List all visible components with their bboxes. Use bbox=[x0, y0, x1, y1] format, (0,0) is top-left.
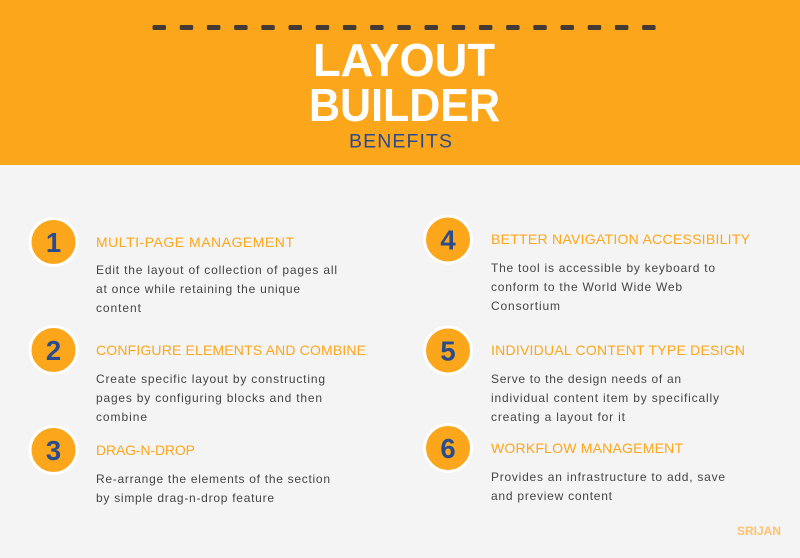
item 1: multi-page management: content bbox=[96, 301, 142, 315]
item 5: individual content type design: creating a layout for it bbox=[491, 410, 626, 424]
item 2: configure elements and combine: Create specific layout by constructing bbox=[96, 372, 325, 386]
subtitle: BENEFITS bbox=[349, 130, 452, 152]
item 5: individual content type design: INDIVIDUAL CONTENT TYPE DESIGN bbox=[491, 342, 745, 358]
item 1: multi-page management: at once while retaining the unique bbox=[96, 282, 300, 296]
item 4: better navigation accessibility: Consortium bbox=[491, 299, 560, 313]
item 2: configure elements and combine: pages by configuring blocks and then bbox=[96, 391, 322, 405]
item 5: individual content type design: Serve to the design needs of an bbox=[491, 372, 681, 386]
item 3: drag-n-drop: 3 bbox=[46, 435, 61, 466]
item 2: configure elements and combine bbox=[30, 326, 366, 424]
title: BUILDER bbox=[309, 79, 500, 131]
item 4: better navigation accessibility: conform to the World Wide Web bbox=[491, 280, 682, 294]
item 6: workflow management: 6 bbox=[440, 433, 456, 464]
item 6: workflow management: and preview content bbox=[491, 489, 613, 503]
item 1: multi-page management: Edit the layout of collection of pages all bbox=[96, 263, 337, 277]
item 3: drag-n-drop: by simple drag-n-drop feature bbox=[96, 491, 274, 505]
item 6: workflow management bbox=[424, 424, 725, 503]
item 6: workflow management: Provides an infrastructure to add, save bbox=[491, 470, 725, 484]
item 6: workflow management: WORKFLOW MANAGEMENT bbox=[491, 440, 683, 456]
item 5: individual content type design: individual content item by specifically bbox=[491, 391, 719, 405]
title: LAYOUT bbox=[313, 34, 495, 86]
item 4: better navigation accessibility: The tool is accessible by keyboard to bbox=[491, 261, 715, 275]
item 2: configure elements and combine: combine bbox=[96, 410, 147, 424]
item 5: individual content type design bbox=[424, 327, 745, 424]
item 1: multi-page management bbox=[30, 218, 337, 315]
item 3: drag-n-drop: DRAG-N-DROP bbox=[96, 442, 195, 458]
header banner bbox=[0, 0, 800, 165]
item 1: multi-page management: 1 bbox=[46, 227, 61, 258]
item 4: better navigation accessibility: 4 bbox=[440, 224, 456, 256]
item 4: better navigation accessibility bbox=[424, 216, 751, 313]
item 2: configure elements and combine: CONFIGURE ELEMENTS AND COMBINE bbox=[96, 342, 366, 358]
item 3: drag-n-drop: Re-arrange the elements of the section bbox=[96, 472, 330, 486]
item 3: drag-n-drop bbox=[30, 426, 330, 505]
item 4: better navigation accessibility: BETTER NAVIGATION ACCESSIBILITY bbox=[491, 231, 751, 247]
item 1: multi-page management: MULTI-PAGE MANAGEMENT bbox=[96, 234, 294, 250]
title bbox=[309, 34, 500, 131]
item 5: individual content type design: 5 bbox=[440, 336, 456, 366]
item 2: configure elements and combine: 2 bbox=[46, 335, 61, 366]
logo: Srijan: SRIJAN bbox=[737, 524, 781, 538]
